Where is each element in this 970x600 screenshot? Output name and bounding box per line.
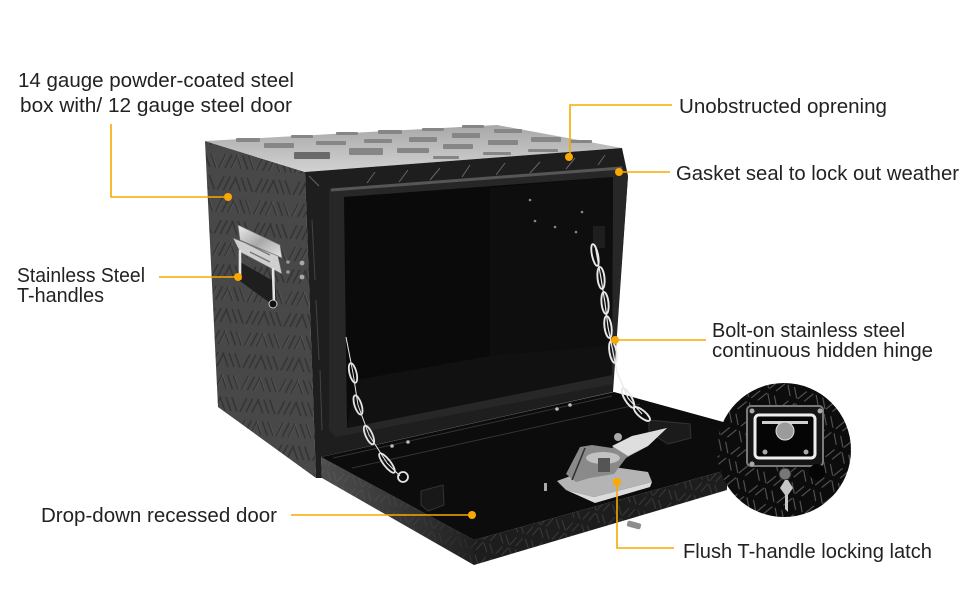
T-handle bar <box>762 421 808 424</box>
callout: flush T-handle latch <box>613 478 932 563</box>
unobstructed interior opening <box>344 177 613 428</box>
callout: bolt-on hinge: continuous hidden hinge <box>712 340 933 362</box>
rubber knob <box>810 464 825 478</box>
callout: stainless steel T-handles: Stainless Steel <box>17 265 145 287</box>
callout: drop-down recessed door: Drop-down recessed door <box>41 505 277 527</box>
rubber gasket seal <box>329 166 628 437</box>
callout: bolt-on hinge <box>611 320 933 362</box>
callout: gasket seal: Gasket seal to lock out weather <box>676 163 959 185</box>
key lock <box>779 468 791 480</box>
callout: drop-down recessed door <box>41 505 476 527</box>
callout: 14 gauge steel box: box with/ 12 gauge steel door <box>20 95 292 117</box>
left support chain <box>346 337 408 482</box>
box front frame <box>305 148 628 478</box>
inset: closed door latch close-up <box>717 383 851 517</box>
drop-down door <box>321 392 727 565</box>
chrome latch recess <box>755 415 815 458</box>
key <box>780 480 793 512</box>
latch center bolt <box>776 422 794 440</box>
callout: unobstructed opening: Unobstructed oprening <box>679 96 887 118</box>
callout: stainless steel T-handles <box>17 265 242 307</box>
callout: flush T-handle latch: Flush T-handle locking latch <box>683 541 932 563</box>
chain bracket right <box>649 420 691 444</box>
callout: 14 gauge steel box <box>18 70 294 201</box>
callout: stainless steel T-handles: T-handles <box>17 285 104 307</box>
box left side panel <box>205 141 316 478</box>
tool box illustration <box>205 125 727 565</box>
callout: unobstructed opening <box>565 96 887 161</box>
callout: 14 gauge steel box: 14 gauge powder-coated steel <box>18 70 294 92</box>
callout: bolt-on hinge: Bolt-on stainless steel <box>712 320 905 342</box>
box top panel with diamond tread <box>205 125 622 172</box>
right support chain <box>590 244 652 423</box>
chain bracket left <box>421 485 444 511</box>
latch plate frame <box>747 406 823 466</box>
infographic: steel tool box with feature callouts <box>17 72 959 565</box>
T-handle on box side <box>233 225 304 308</box>
T-handle locking latch on door <box>544 428 667 530</box>
